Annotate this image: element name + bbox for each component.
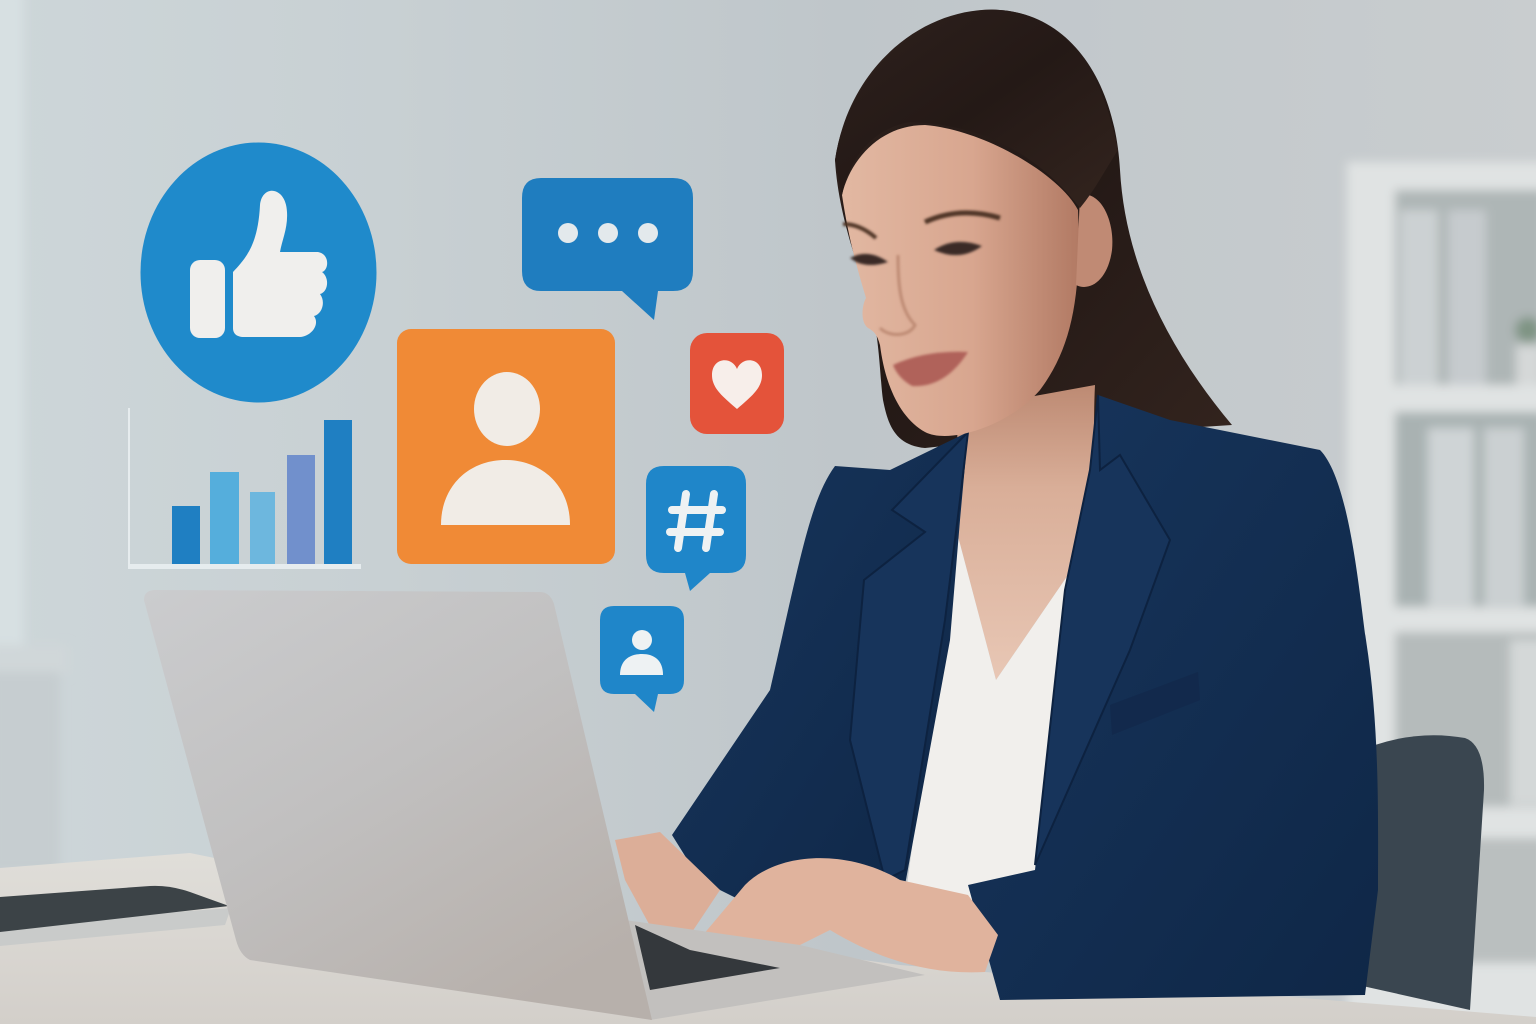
bookshelf bbox=[1347, 162, 1536, 1024]
laptop base bbox=[625, 920, 925, 1020]
laptop lid bbox=[144, 590, 652, 1020]
lapel left bbox=[850, 432, 968, 880]
hair front bbox=[835, 10, 1118, 208]
desk bbox=[0, 853, 1536, 1024]
hair back bbox=[835, 10, 1232, 448]
window frame at left bbox=[0, 0, 68, 872]
facial features bbox=[843, 213, 1000, 386]
pocket flap bbox=[1110, 672, 1200, 735]
neck and chest bbox=[955, 385, 1095, 680]
icon: thumbs up bbox=[140, 142, 376, 402]
tablet on desk bbox=[0, 886, 231, 946]
icon: orange profile card bbox=[397, 329, 615, 564]
office chair bbox=[1358, 735, 1484, 1010]
chart: bar chart bbox=[128, 408, 361, 569]
jacket right side and sleeve bbox=[968, 395, 1378, 1000]
icon: hashtag bubble bbox=[646, 466, 746, 591]
lapel right bbox=[1035, 395, 1170, 865]
icon: chat bubble with dots bbox=[522, 178, 693, 320]
face bbox=[842, 125, 1079, 436]
keyboard bbox=[635, 925, 780, 990]
ear bbox=[1076, 194, 1112, 287]
hands on keyboard bbox=[615, 832, 998, 972]
icon: small profile bubble bbox=[600, 606, 684, 712]
woman bbox=[672, 10, 1378, 1000]
icon: heart bbox=[690, 333, 784, 434]
jacket left side and sleeve bbox=[672, 432, 968, 900]
laptop bbox=[144, 590, 925, 1020]
blouse bbox=[905, 525, 1068, 900]
